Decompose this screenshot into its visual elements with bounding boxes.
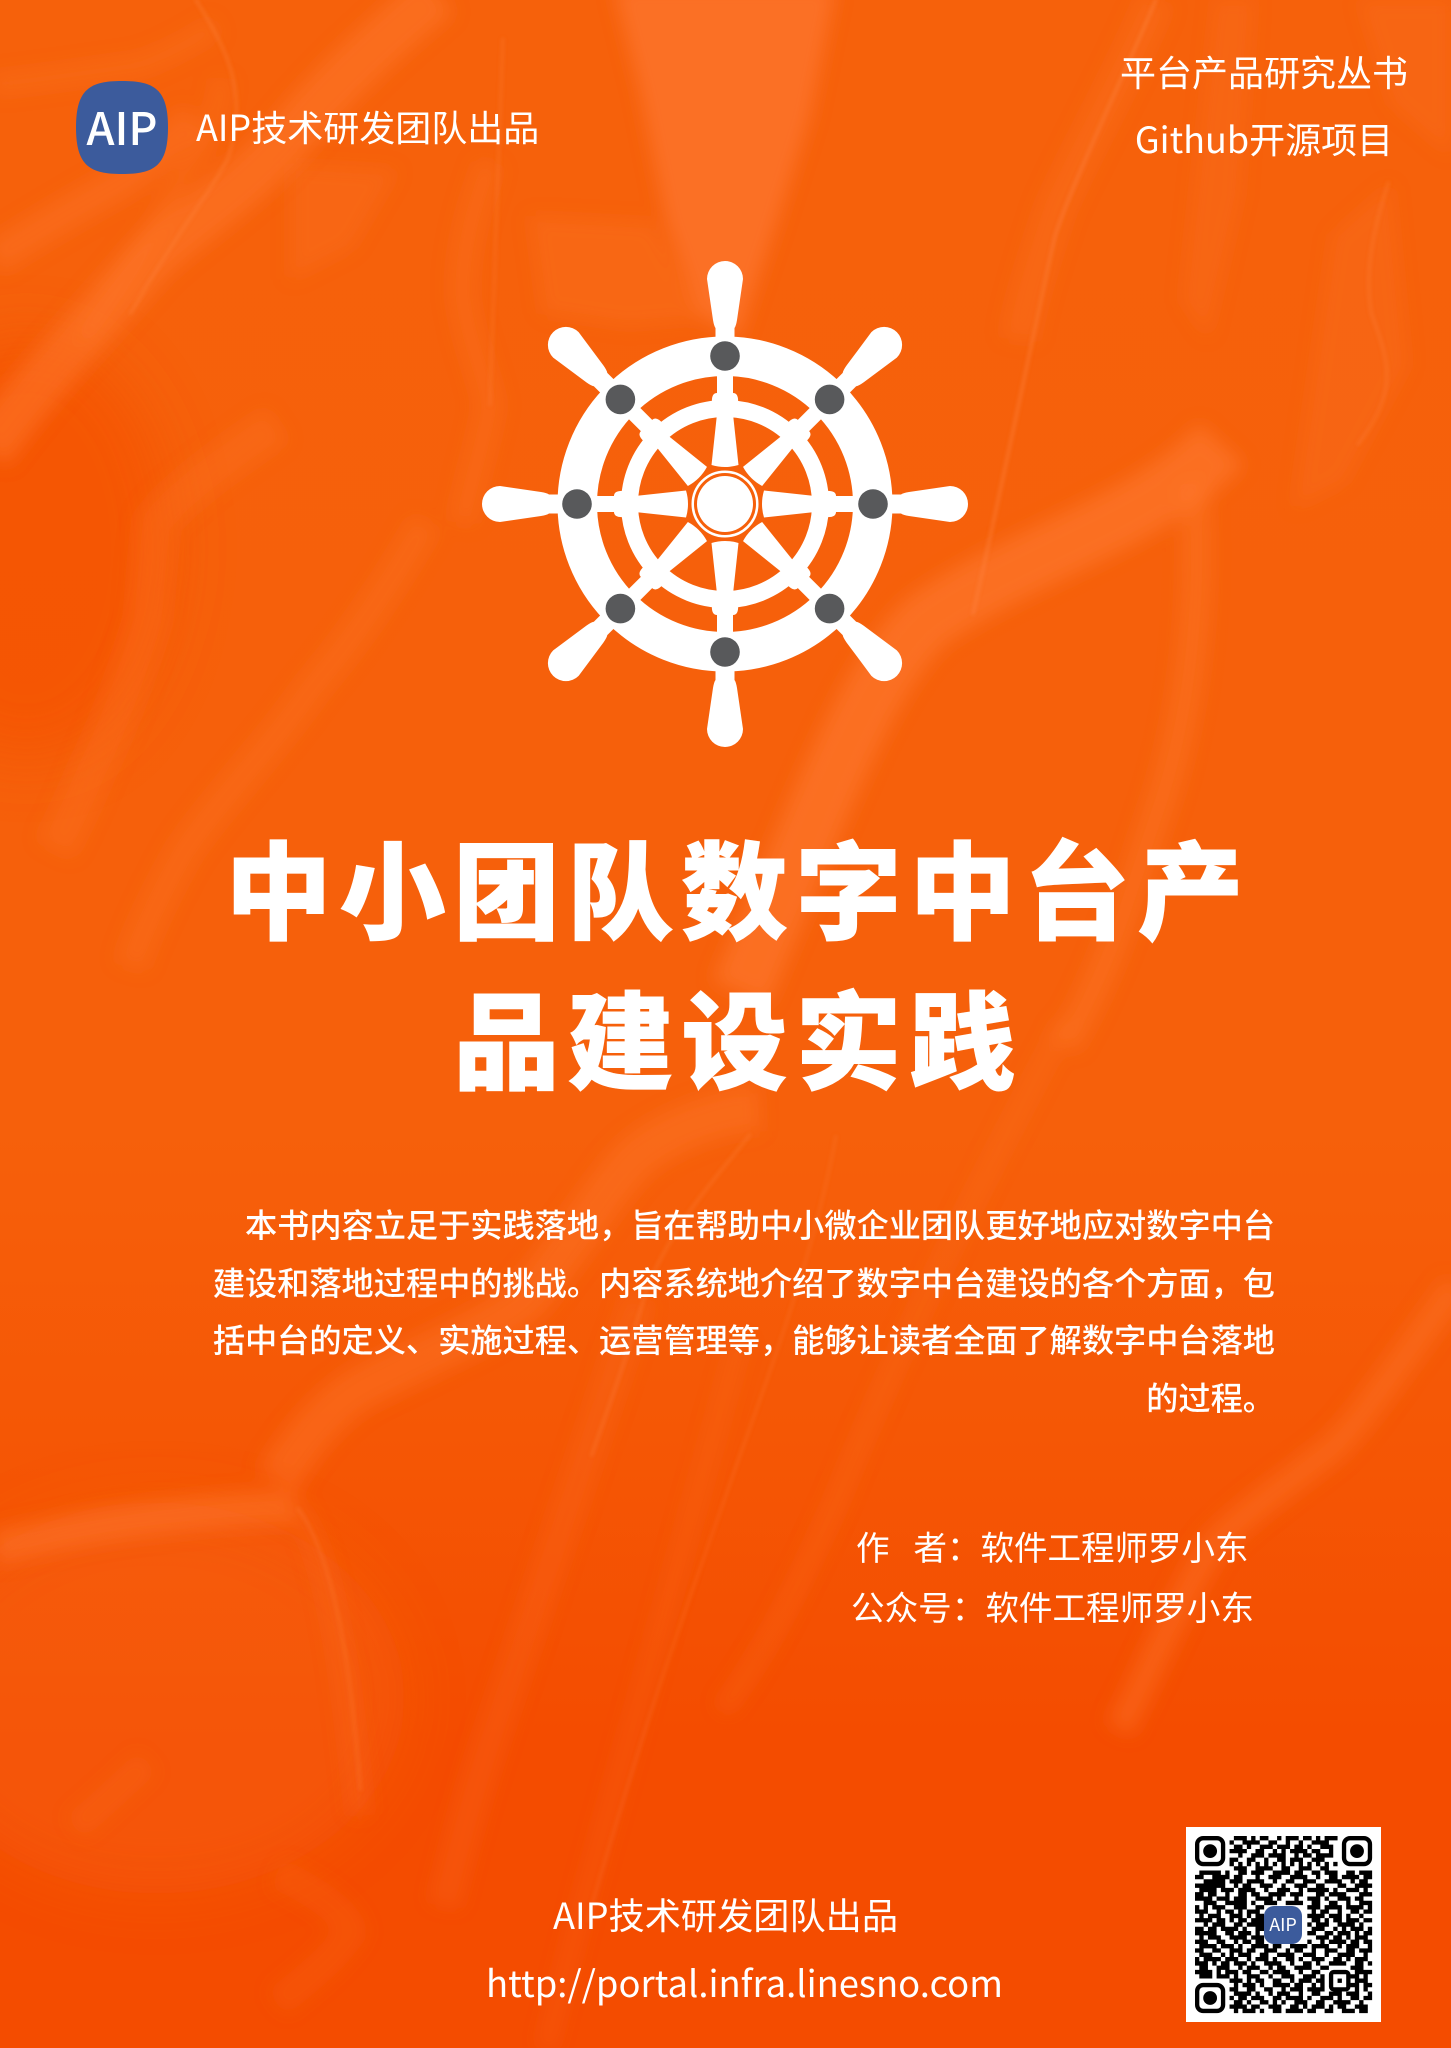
header: team name: AIP技术研发团队出品 bbox=[196, 100, 539, 152]
description paragraph: 的过程。 bbox=[1146, 1374, 1275, 1420]
public account line: 公众号：软件工程师罗小东 bbox=[851, 1581, 1254, 1630]
QR code: AIP bbox=[1269, 1911, 1297, 1937]
title bbox=[226, 808, 1252, 1112]
header: series line: 平台产品研究丛书 bbox=[1120, 44, 1408, 96]
logo badge: AIP bbox=[76, 81, 168, 174]
description paragraph: 本书内容立足于实践落地，旨在帮助中小微企业团队更好地应对数字中台 bbox=[245, 1201, 1275, 1247]
description paragraph bbox=[213, 1201, 1275, 1420]
icon: ship wheel bbox=[482, 261, 968, 747]
author line: 作 者：软件工程师罗小东 bbox=[856, 1521, 1249, 1570]
description paragraph: 建设和落地过程中的挑战。内容系统地介绍了数字中台建设的各个方面，包 bbox=[213, 1259, 1275, 1305]
header: github line: Github开源项目 bbox=[1135, 112, 1393, 164]
footer: team name: AIP技术研发团队出品 bbox=[553, 1888, 898, 1940]
footer: url: http://portal.infra.linesno.com bbox=[486, 1956, 1003, 2008]
QR code bbox=[1186, 1827, 1381, 2022]
title: 品建设实践 bbox=[454, 958, 1024, 1112]
description paragraph: 括中台的定义、实施过程、运营管理等，能够让读者全面了解数字中台落地 bbox=[213, 1316, 1275, 1362]
logo badge: AIP: AIP bbox=[86, 93, 158, 158]
title: 中小团队数字中台产 bbox=[226, 808, 1252, 962]
